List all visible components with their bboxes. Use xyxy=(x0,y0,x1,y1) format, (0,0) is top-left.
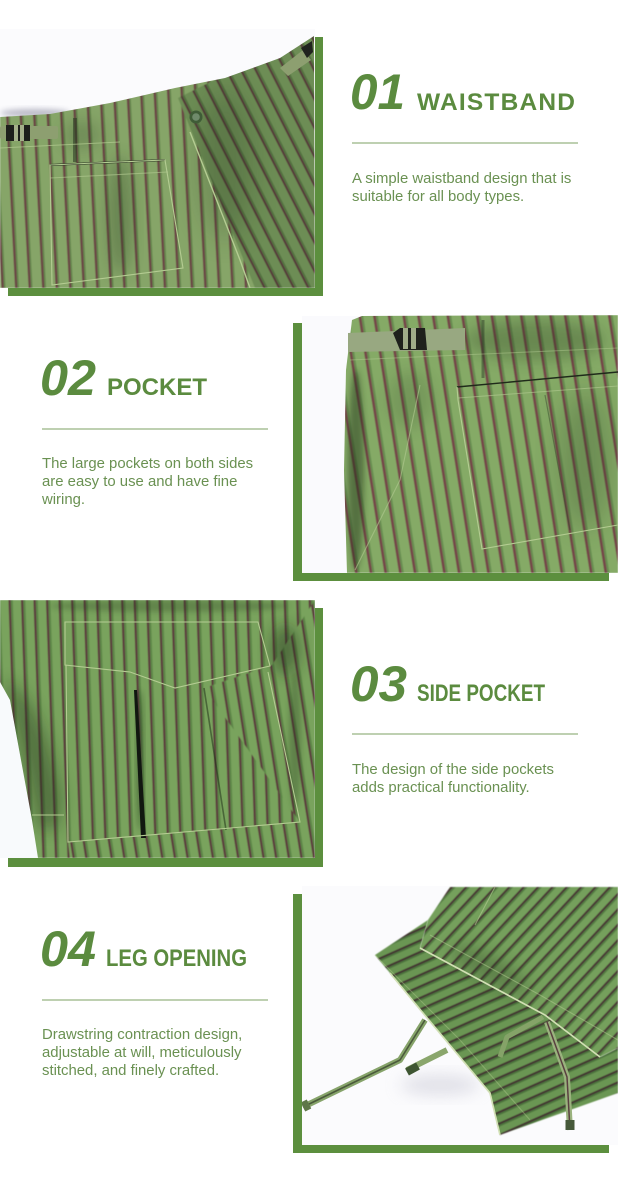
panel: leg opening feature xyxy=(293,886,618,1153)
panel: leg opening text xyxy=(40,921,268,1079)
panel: waistband text xyxy=(350,64,578,205)
heading: leg opening: LEG OPENING xyxy=(106,945,247,972)
number 02: 02 xyxy=(40,350,96,406)
number 04: 04 xyxy=(40,921,96,977)
number 01: 01 xyxy=(350,64,405,120)
description: waistband: A simple waistband design that is xyxy=(352,171,571,187)
icon: right waist adjuster xyxy=(280,41,313,76)
photo: leg opening drawstring xyxy=(302,886,618,1145)
upper leg fabric xyxy=(420,887,618,1057)
frame: pocket photo accent xyxy=(293,323,609,581)
description: side pocket: The design of the side pockets xyxy=(352,762,554,778)
icon: left waist adjuster xyxy=(0,125,58,141)
description: leg opening: stitched, and finely crafted. xyxy=(42,1063,219,1079)
photo: front pocket close-up xyxy=(344,315,618,573)
heading: pocket: POCKET xyxy=(107,374,207,401)
drawstring cords xyxy=(303,1017,570,1130)
heading: waistband: WAISTBAND xyxy=(417,89,575,116)
description: leg opening: Drawstring contraction design, xyxy=(42,1027,242,1043)
panel: pocket feature xyxy=(293,315,618,581)
description: pocket: The large pockets on both sides xyxy=(42,456,253,472)
panel: side pocket text xyxy=(350,656,578,796)
description: pocket: are easy to use and have fine xyxy=(42,474,237,490)
lower leg fabric xyxy=(375,920,618,1135)
description: pocket: wiring. xyxy=(41,492,85,508)
heading: side pocket: SIDE POCKET xyxy=(417,680,545,707)
frame: waistband photo accent xyxy=(8,37,323,296)
description: leg opening: adjustable at will, meticulously xyxy=(42,1045,242,1061)
panel: side pocket feature xyxy=(0,600,323,867)
photo: waistband close-up xyxy=(0,29,315,288)
frame: leg opening photo accent xyxy=(293,894,609,1153)
photo: side cargo pocket xyxy=(0,600,315,858)
number 03: 03 xyxy=(350,656,407,712)
panel: waistband feature xyxy=(0,29,323,296)
icon: snap button xyxy=(190,110,202,124)
description: waistband: suitable for all body types. xyxy=(352,189,524,205)
description: side pocket: adds practical functionality. xyxy=(352,780,530,796)
icon: waist adjuster tab xyxy=(348,328,465,352)
panel: pocket text xyxy=(40,350,268,508)
frame: side pocket photo accent xyxy=(8,608,323,867)
